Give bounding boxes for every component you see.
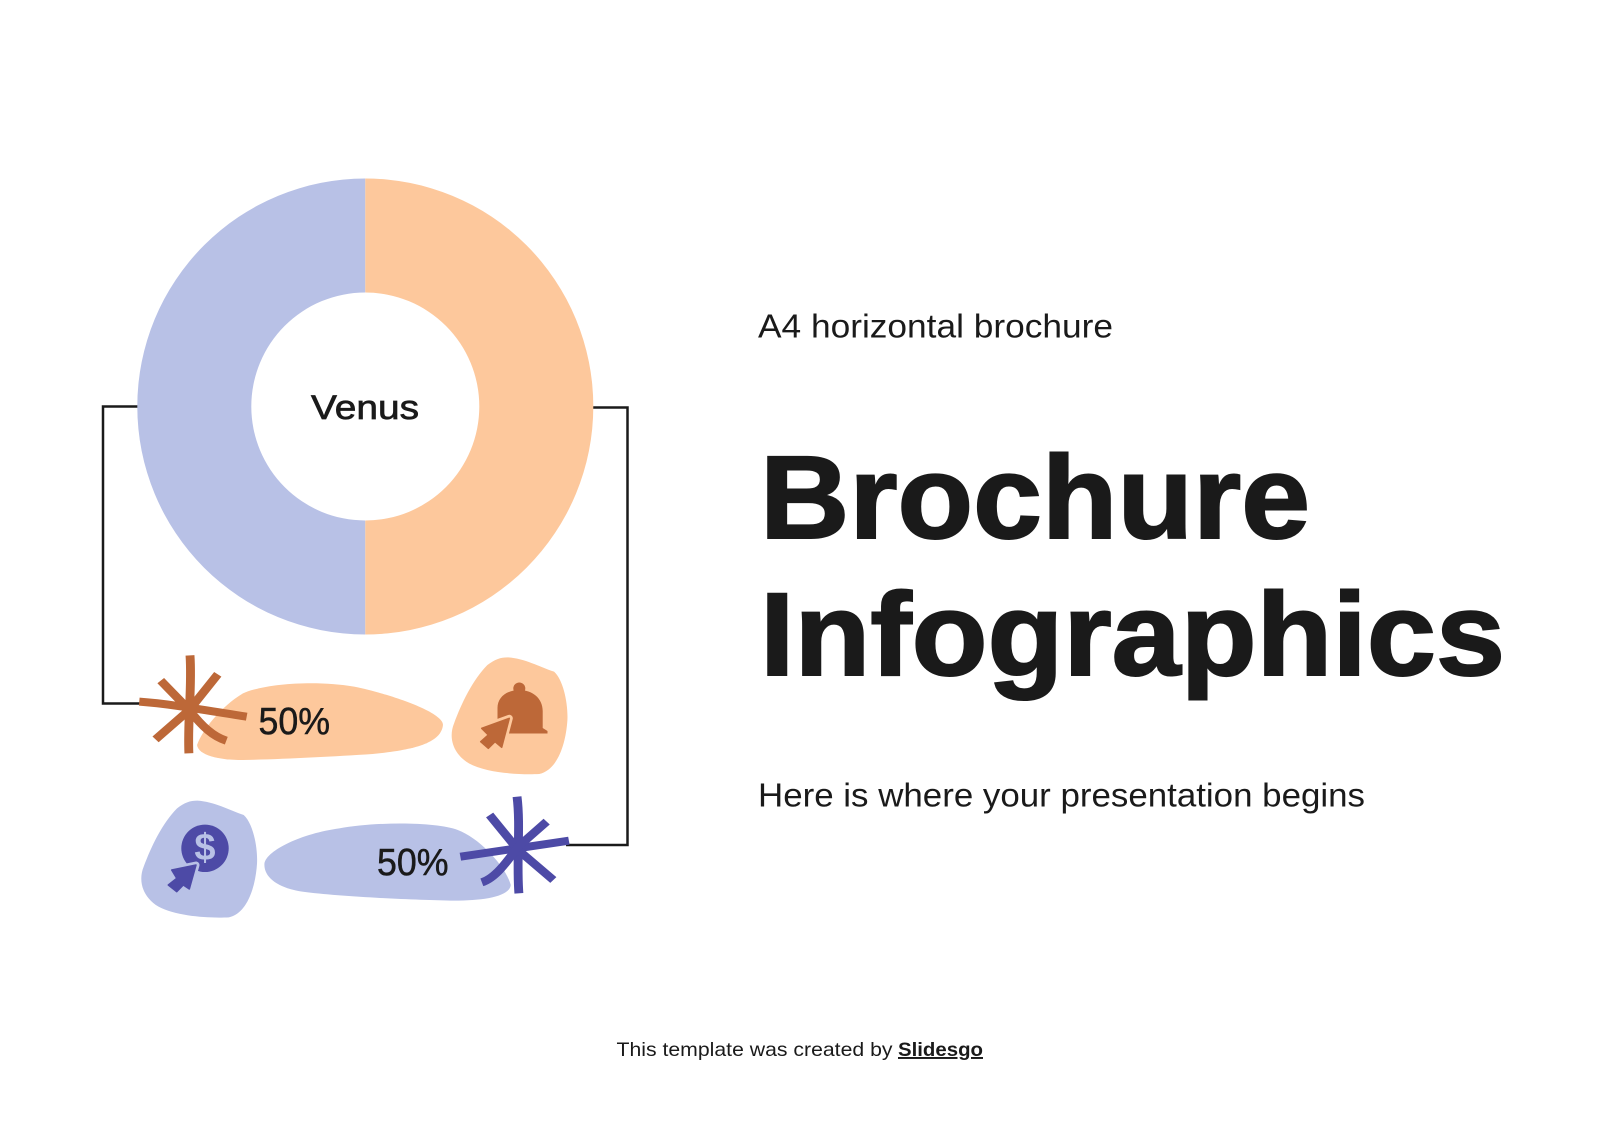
footer credit [616, 1039, 983, 1061]
icon: dollar coin with cursor [168, 825, 229, 892]
peach row: 50% value with asterisk and bell icon [139, 655, 567, 774]
peach value blob [197, 683, 443, 760]
subtitle: A4 horizontal brochure [758, 308, 1113, 344]
lavender row: 50% value with asterisk and dollar icon [141, 797, 569, 918]
title line 1: Brochure [760, 432, 1310, 564]
lavender value blob [264, 824, 511, 901]
footer credit: Slidesgo [898, 1039, 983, 1061]
icon: brown asterisk [139, 655, 247, 753]
connector line: donut left to brown asterisk [103, 406, 142, 704]
footer credit: This template was created by [616, 1039, 893, 1061]
peach value label: 50% [258, 701, 330, 743]
title line 2: Infographics [760, 569, 1505, 701]
peach icon blob [452, 657, 567, 774]
donut segment: peach 50% [365, 178, 593, 634]
donut chart [137, 178, 593, 634]
title [760, 432, 1505, 701]
tagline: Here is where your presentation begins [758, 776, 1365, 814]
donut centre label: Venus [311, 389, 419, 427]
lavender value label: 50% [377, 842, 448, 884]
donut segment: lavender 50% [137, 178, 365, 634]
icon: dollar coin with cursor: $ [194, 827, 216, 869]
connector line: donut right to blue asterisk [566, 408, 628, 845]
icon: bell with cursor [481, 682, 548, 748]
lavender icon blob [141, 801, 257, 918]
icon: blue asterisk [460, 797, 569, 893]
